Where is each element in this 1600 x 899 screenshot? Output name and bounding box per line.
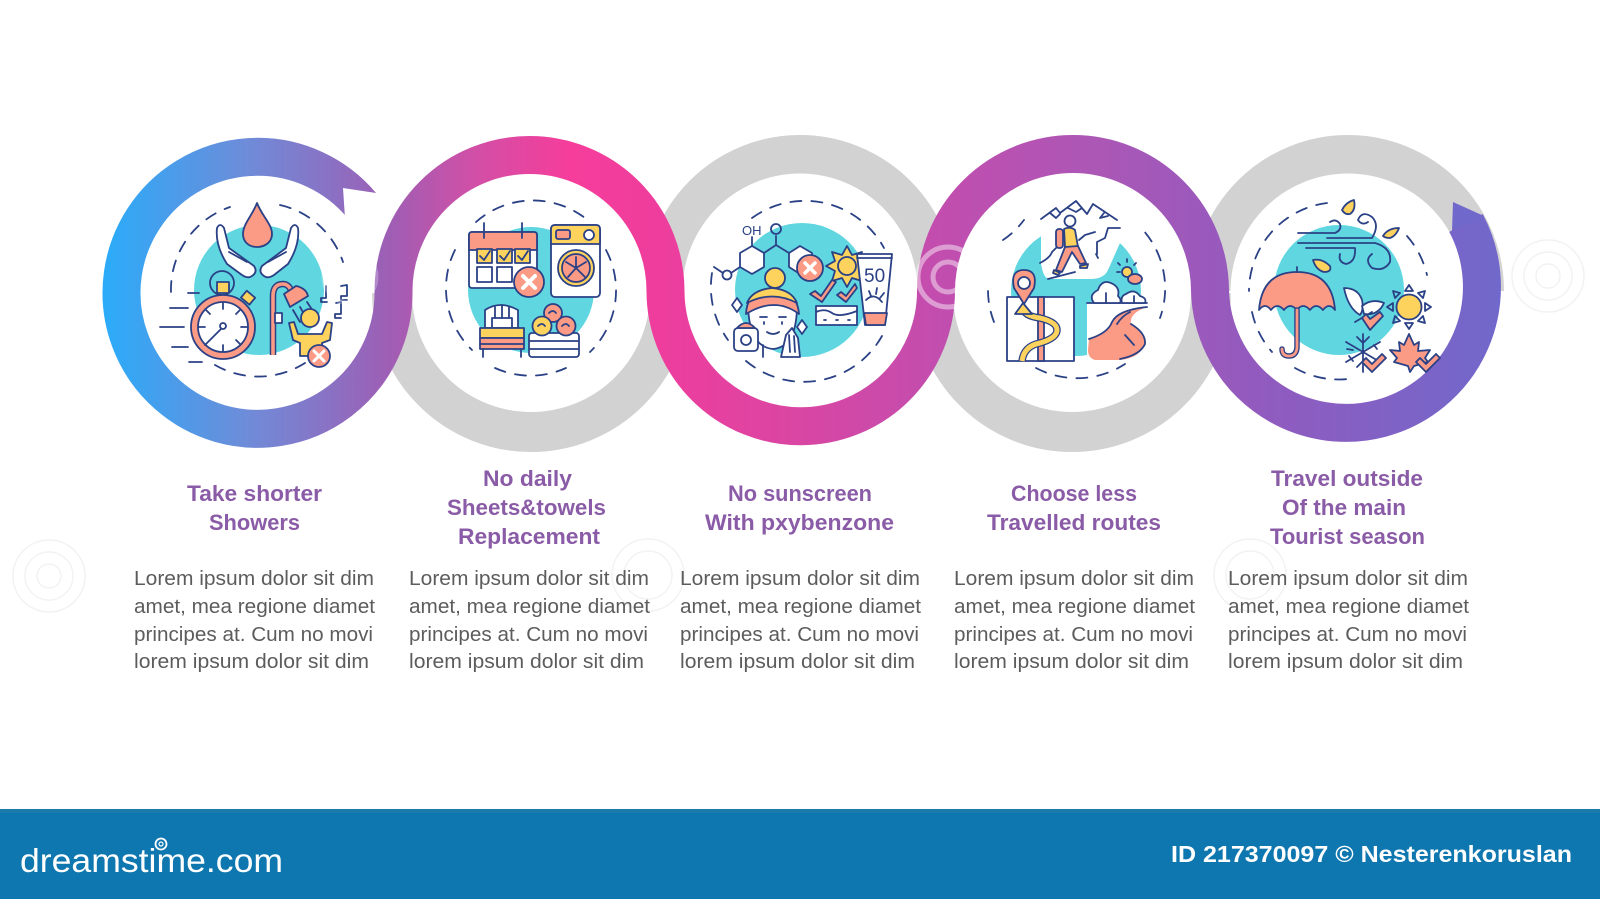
heading: Travelled routes (987, 510, 1161, 535)
icon: sunscreen tube: 50 (864, 266, 885, 287)
step 1 text (134, 481, 375, 673)
footer logo: dreamstime.com (20, 842, 283, 879)
icon: sunscreen tube (857, 254, 892, 325)
heading (187, 481, 322, 535)
icon group 2: sheets and towels (446, 200, 616, 376)
heading (447, 466, 606, 549)
heading: No sunscreen (728, 481, 872, 506)
watermark spirals (13, 240, 1584, 612)
icon: mountains (1041, 201, 1117, 220)
body text: amet, mea regione diamet (409, 596, 650, 618)
footer credit: ID 217370097 © Nesterenkoruslan (1171, 841, 1572, 867)
icon: towels (529, 304, 579, 357)
icon: molecule: OH (742, 223, 762, 238)
icon group 4: less travelled routes (988, 200, 1165, 378)
body text: principes at. Cum no movi (680, 624, 919, 646)
heading: No daily (483, 466, 572, 491)
body text: amet, mea regione diamet (680, 596, 921, 618)
step 5 text (1228, 466, 1469, 673)
icon: falling leaves (1313, 200, 1399, 272)
heading: Take shorter (187, 481, 322, 506)
icon: sun and cloud (1117, 259, 1142, 284)
icon: music notes (321, 285, 347, 318)
body text: principes at. Cum no movi (954, 624, 1193, 646)
icon: map with road (1007, 297, 1074, 361)
body text: Lorem ipsum dolor sit dim (134, 568, 374, 590)
icon: spring leaves (1344, 288, 1384, 330)
icon group 3: sunscreen (711, 201, 892, 382)
body text: amet, mea regione diamet (134, 596, 375, 618)
icon: washing machine (551, 225, 600, 297)
icon: maple leaf (1390, 334, 1440, 372)
icon: summer sun (1387, 285, 1431, 329)
icon: cupping hands (217, 225, 298, 277)
icon: molecule (714, 223, 823, 281)
grey ring segments (392, 155, 1484, 432)
body text: principes at. Cum no movi (134, 624, 373, 646)
heading: Of the main (1282, 495, 1406, 520)
icon: rocky path lines (1040, 228, 1120, 279)
body text: principes at. Cum no movi (409, 624, 648, 646)
heading: Travel outside (1271, 466, 1423, 491)
heading: Replacement (458, 524, 601, 549)
icon: skin with checks (810, 280, 857, 325)
icon: bed (480, 305, 524, 357)
body text: lorem ipsum dolor sit dim (134, 651, 369, 673)
heading: Showers (209, 510, 300, 535)
step 2 text (409, 466, 650, 673)
icon: water drop (243, 203, 272, 247)
body text: Lorem ipsum dolor sit dim (954, 568, 1194, 590)
winding gradient ribbon (122, 154, 1484, 429)
icon: wind swirls (1298, 214, 1390, 269)
step 4 text (954, 481, 1195, 673)
body text: lorem ipsum dolor sit dim (1228, 651, 1463, 673)
heading: Choose less (1011, 481, 1137, 506)
icon: woman with face cream (732, 268, 807, 357)
heading: With pxybenzone (705, 510, 894, 535)
heading: Sheets&towels (447, 495, 606, 520)
icon: hiker (1053, 216, 1088, 275)
icon: stopwatch (160, 271, 255, 362)
icon group 1: shorter showers (160, 203, 347, 377)
icon: snowflake (1346, 334, 1386, 372)
footer band (0, 809, 1600, 899)
icon: shower with person (273, 284, 332, 367)
heading (705, 481, 894, 535)
body text: Lorem ipsum dolor sit dim (409, 568, 649, 590)
watermark spirals on ring (324, 247, 978, 307)
body text (1228, 568, 1469, 673)
body text (954, 568, 1195, 673)
icon: umbrella (1259, 267, 1335, 356)
body text (134, 568, 375, 673)
icon: river landscape (1087, 282, 1147, 360)
white ring interiors (412, 174, 1466, 412)
body text: amet, mea regione diamet (954, 596, 1195, 618)
body text: lorem ipsum dolor sit dim (680, 651, 915, 673)
icon: calendar (469, 223, 544, 297)
body text: principes at. Cum no movi (1228, 624, 1467, 646)
body text: lorem ipsum dolor sit dim (954, 651, 1189, 673)
body text: amet, mea regione diamet (1228, 596, 1469, 618)
body text: Lorem ipsum dolor sit dim (680, 568, 920, 590)
body text: lorem ipsum dolor sit dim (409, 651, 644, 673)
body text (680, 568, 921, 673)
icon: sun (826, 246, 868, 287)
heading: Tourist season (1270, 524, 1425, 549)
heading (987, 481, 1161, 535)
heading (1270, 466, 1425, 549)
step 3 text (680, 481, 921, 673)
mountain backdrop (1041, 200, 1145, 279)
icon group 5: travel off season (1249, 200, 1440, 379)
body text (409, 568, 650, 673)
icon: location pin (1013, 270, 1035, 304)
body text: Lorem ipsum dolor sit dim (1228, 568, 1468, 590)
